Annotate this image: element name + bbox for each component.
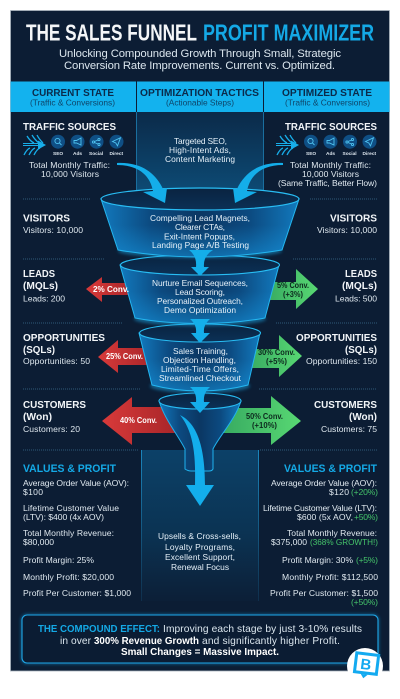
opportunities: (SQLs) <box>23 345 55 356</box>
tactic text: stage 1: Clearer CTAs, <box>175 222 225 232</box>
arrow labels: (+3%) <box>283 290 303 299</box>
customers <box>23 400 86 434</box>
header band: (Traffic & Conversions) <box>30 98 115 108</box>
tactic text: retention <box>158 531 241 572</box>
tactic text: stage 2: Demo Optimization <box>164 305 236 315</box>
header band: (Actionable Steps) <box>166 98 234 108</box>
customers: CUSTOMERS <box>314 400 377 411</box>
tactic text: retention: Excellent Support, <box>165 552 235 562</box>
leads: LEADS <box>23 269 55 280</box>
green arrow: 50% <box>218 396 301 445</box>
stage labels: optimized <box>296 214 377 434</box>
tactic text: retention: Renewal Focus <box>171 562 229 572</box>
icons: traffic channels <box>51 135 124 157</box>
tactic text: stage 3 <box>159 346 242 383</box>
title <box>26 20 374 46</box>
customers: CUSTOMERS <box>23 400 86 411</box>
values and profit: current: $100 <box>23 487 43 497</box>
visitors: VISITORS <box>330 214 377 225</box>
red arrow: 2% <box>86 277 135 302</box>
icons: traffic channels: SEO <box>306 151 316 157</box>
funnel stage 3 <box>139 324 260 393</box>
red arrow: 25% <box>98 340 155 373</box>
values and profit: optimized: (+20%) <box>351 487 378 497</box>
leads: Leads: 500 <box>335 294 377 304</box>
tactic text: stage 1: Compelling Lead Magnets, <box>150 213 250 223</box>
header band: OPTIMIZED STATE <box>282 88 372 99</box>
values and profit: current: $80,000 <box>23 537 54 547</box>
arrow labels: (+5%) <box>266 357 287 366</box>
values and profit: optimized: +50%) <box>354 512 378 522</box>
opportunities: Opportunities: 150 <box>306 356 377 366</box>
tactic text: stage 1 <box>150 213 250 250</box>
customers: (Won) <box>23 412 52 423</box>
icons: traffic channels: Direct <box>110 151 123 157</box>
leads: LEADS <box>345 269 377 280</box>
values and profit: current: Average Order Value (AOV): <box>23 478 129 488</box>
values and profit: current: Profit Per Customer: $1,000 <box>23 588 131 598</box>
values and profit: optimized: $120 <box>329 487 349 497</box>
arrow labels: (+10%) <box>252 421 277 430</box>
arrow labels: 40% Conv. <box>120 416 157 425</box>
tactic text: traffic: High-Intent Ads, <box>169 145 231 155</box>
icons: traffic channels: Social <box>342 151 357 157</box>
leads: (MQLs) <box>342 281 377 292</box>
subtitle: Conversion Rate Improvements. Current vs. Optimized. <box>64 60 335 72</box>
values and profit: optimized: Average Order Value (AOV): <box>271 478 377 488</box>
funnel stage 1 <box>101 188 299 258</box>
callout: compound effect: THE COMPOUND EFFECT: <box>38 624 160 635</box>
callout: compound effect: and significantly higher Profit. <box>202 636 340 647</box>
icons: traffic channels: Ads <box>326 151 335 157</box>
tactic text: stage 1: Exit-Intent Popups, <box>164 232 235 242</box>
values and profit: optimized: $600 (5x AOV, <box>297 512 353 522</box>
values and profit: current: Profit Margin: 25% <box>23 555 94 565</box>
opportunities: (SQLs) <box>345 345 377 356</box>
tactic text: traffic: Targeted SEO, <box>174 136 227 146</box>
subtitle <box>59 48 341 72</box>
callout: compound effect: in over <box>60 636 92 647</box>
header band <box>10 82 390 112</box>
green arrow: 30% <box>245 335 302 377</box>
values and profit: current: (LTV): $400 (4x AOV) <box>23 512 104 522</box>
icons: traffic channels: SEO <box>53 151 63 157</box>
leads <box>335 269 377 304</box>
header band: (Traffic & Conversions) <box>285 98 370 108</box>
traffic sources: current: Total Monthly Traffic: <box>29 160 110 170</box>
opportunities <box>296 333 377 366</box>
traffic sources: current <box>23 122 124 179</box>
green arrow: 5% <box>264 269 318 309</box>
icons: traffic channels: Direct <box>362 151 376 157</box>
traffic sources: optimized: Total Monthly Traffic: <box>290 160 371 170</box>
tactic text: stage 2: Personalized Outreach, <box>157 296 243 306</box>
header band: CURRENT STATE <box>32 88 114 99</box>
arrow: stage 2 to 3 <box>190 319 210 343</box>
values and profit: optimized: (+5%) <box>356 555 378 565</box>
arrow labels: 2% Conv. <box>93 285 129 294</box>
arrow: stage 1 to 2 <box>189 250 213 276</box>
customers: Customers: 20 <box>23 424 80 434</box>
subtitle: Unlocking Compounded Growth Through Small, Strategic <box>59 48 341 60</box>
tactic text: stage 2 <box>152 278 248 315</box>
icons: traffic channels: Ads <box>73 151 82 157</box>
arrow: left inflow <box>117 163 167 203</box>
tactic text: stage 3: Sales Training, <box>173 346 228 356</box>
tactic text: traffic <box>165 136 235 164</box>
center column lower panel <box>142 450 258 601</box>
callout: compound effect: Small Changes = Massive Impact. <box>121 647 279 658</box>
dotted separators <box>23 199 377 450</box>
tactic text: stage 2: Nurture Email Sequences, <box>152 278 248 288</box>
values and profit: optimized: VALUES & PROFIT <box>284 463 377 475</box>
title: THE SALES FUNNEL <box>26 20 197 46</box>
customers: (Won) <box>349 412 377 423</box>
traffic sources: optimized: TRAFFIC SOURCES <box>285 122 377 133</box>
tactic text: stage 2: Lead Scoring, <box>175 287 225 297</box>
values and profit: optimized: Monthly Profit: $112,500 <box>282 572 378 582</box>
leads <box>23 269 65 304</box>
logo badge: B <box>359 656 372 674</box>
opportunities: Opportunities: 50 <box>23 356 90 366</box>
values and profit: optimized: Profit Margin: 30% <box>282 555 353 565</box>
icon: speed arrow left <box>23 135 46 155</box>
values and profit: current: Lifetime Customer Value <box>23 503 119 513</box>
red arrow: 40% <box>102 397 180 445</box>
values and profit: current: Total Monthly Revenue: <box>23 528 114 538</box>
values and profit: optimized: Profit Per Customer: $1,500 <box>270 588 378 598</box>
callout: compound effect: 300% Revenue Growth <box>94 636 199 647</box>
customers: Customers: 75 <box>321 424 377 434</box>
tactic text: stage 3: Objection Handling, <box>163 355 236 365</box>
values and profit: current: VALUES & PROFIT <box>23 463 116 475</box>
funnel stage 2 <box>120 255 280 326</box>
arrow labels: 25% Conv. <box>106 352 143 361</box>
arrow labels <box>93 281 309 430</box>
tactic text: stage 1: Landing Page A/B Testing <box>152 240 249 250</box>
traffic sources: optimized: (Same Traffic, Better Flow) <box>278 178 377 188</box>
arrow labels: 5% Conv. <box>277 281 309 290</box>
visitors: VISITORS <box>23 214 70 225</box>
tactic text: retention: Loyalty Programs, <box>165 542 235 552</box>
opportunities: OPPORTUNITIES <box>23 333 105 344</box>
arrow labels: 50% Conv. <box>246 412 283 421</box>
leads: (MQLs) <box>23 281 58 292</box>
icons: traffic channels: Social <box>89 151 103 157</box>
traffic sources: optimized <box>276 122 377 188</box>
values and profit: optimized <box>263 463 378 607</box>
values and profit: optimized: (+50%) <box>351 597 378 607</box>
values and profit: optimized: Total Monthly Revenue: <box>287 528 377 538</box>
arrow: stage 3 to 4 <box>190 387 210 413</box>
visitors: Visitors: 10,000 <box>23 225 83 235</box>
center column upper panel <box>136 112 264 190</box>
callout: compound effect <box>22 615 378 663</box>
values and profit: current: Monthly Profit: $20,000 <box>23 572 114 582</box>
traffic sources: current: TRAFFIC SOURCES <box>23 122 116 133</box>
opportunities: OPPORTUNITIES <box>296 333 377 344</box>
traffic sources: current: 10,000 Visitors <box>41 169 99 179</box>
tactic text: traffic: Content Marketing <box>165 154 235 164</box>
arrow: right inflow <box>233 163 283 203</box>
funnel stage 4 <box>159 393 241 471</box>
tactic text: stage 3: Streamlined Checkout <box>159 373 242 383</box>
logo badge <box>347 648 383 684</box>
opportunities <box>23 333 105 366</box>
visitors: Visitors: 10,000 <box>317 225 377 235</box>
traffic sources: optimized: 10,000 Visitors <box>302 169 359 179</box>
stage labels: current <box>23 214 105 434</box>
values and profit: optimized: (368% GROWTH!) <box>310 537 378 547</box>
arrow labels: 30% Conv. <box>258 348 295 357</box>
visitors <box>317 214 377 235</box>
customers <box>314 400 377 434</box>
header band: OPTIMIZATION TACTICS <box>140 88 259 99</box>
visitors <box>23 214 83 235</box>
tactic text: retention: Upsells & Cross-sells, <box>158 531 241 541</box>
arrow: final output <box>180 415 214 506</box>
leads: Leads: 200 <box>23 294 65 304</box>
callout: compound effect: Improving each stage by just 3-10% results <box>163 624 362 635</box>
tactic text: stage 3: Limited-Time Offers, <box>161 364 239 374</box>
values and profit: optimized: Lifetime Customer Value (LTV): <box>263 503 377 513</box>
values and profit: current <box>23 463 131 598</box>
icons: traffic channels <box>304 135 376 157</box>
icon: speed arrow right <box>276 135 299 155</box>
values and profit: optimized: $375,000 <box>271 537 307 547</box>
